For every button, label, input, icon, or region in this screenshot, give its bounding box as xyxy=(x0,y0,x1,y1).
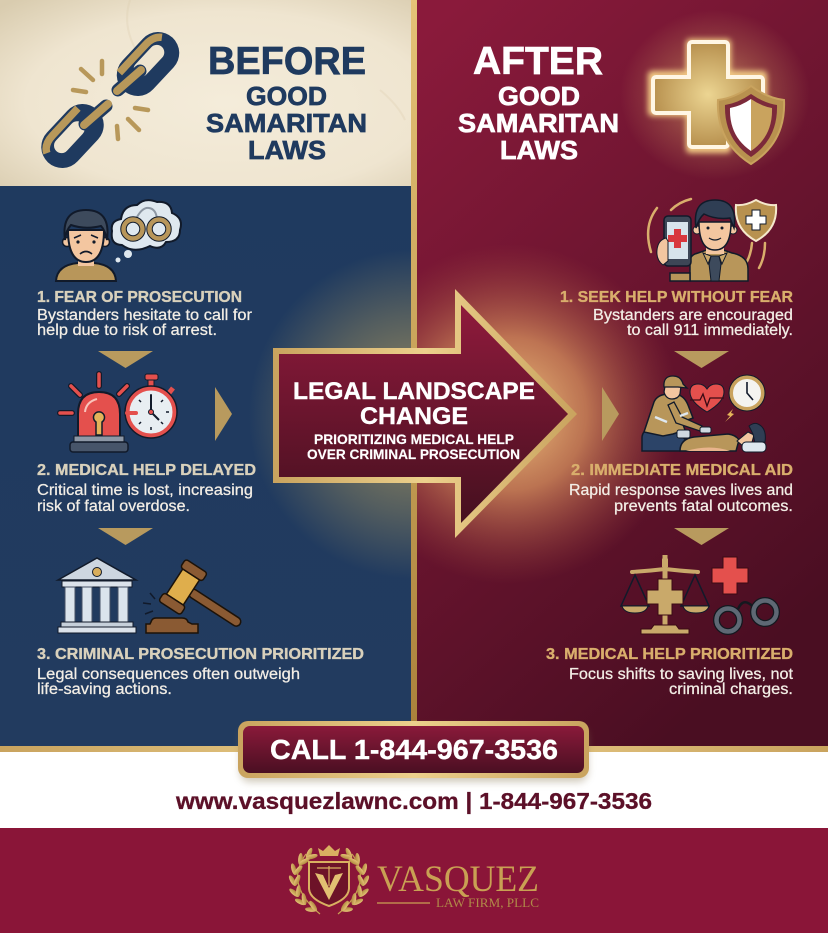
text: arrow label: CHANGE xyxy=(360,403,468,430)
text: criminal prosecution prioritized: 3. CRIMINAL PROSECUTION PRIORITIZED xyxy=(37,646,364,663)
text: medical help prioritized: 3. MEDICAL HELP PRIORITIZED xyxy=(546,646,793,663)
heading: before: GOOD xyxy=(246,81,327,111)
heading: after: AFTER xyxy=(473,40,603,83)
icon: glowing cross with shield xyxy=(652,42,784,164)
call button: CALL 1-844-967-3536 xyxy=(270,734,558,765)
text: medical help prioritized: Focus shifts to saving lives, not xyxy=(569,666,794,683)
heading: after xyxy=(458,40,619,165)
text: immediate medical aid xyxy=(569,462,793,515)
icon: siren and stopwatch xyxy=(60,374,177,452)
text: medical help prioritized xyxy=(546,646,794,698)
text: medical help delayed xyxy=(37,462,256,515)
center gold divider xyxy=(411,0,417,746)
text: immediate medical aid: prevents fatal outcomes. xyxy=(614,498,793,515)
arrow: legal landscape change xyxy=(273,289,577,538)
text: arrow label: OVER CRIMINAL PROSECUTION xyxy=(307,447,520,462)
icon: person with phone xyxy=(648,199,776,281)
text: medical help delayed: risk of fatal overdose. xyxy=(37,498,190,515)
arrow: right left column xyxy=(215,387,232,441)
panel: before column xyxy=(0,186,411,746)
text: logo wordmark: LAW FIRM, PLLC xyxy=(436,896,539,910)
icon: scales, medical cross and handcuffs xyxy=(621,555,776,634)
text: immediate medical aid: 2. IMMEDIATE MEDICAL AID xyxy=(571,462,793,479)
arrow: down 2 xyxy=(98,528,153,545)
arrow: down 4 xyxy=(674,528,729,545)
heading: before: BEFORE xyxy=(208,40,366,83)
text: arrow label: LEGAL LANDSCAPE xyxy=(293,378,535,405)
footer band xyxy=(0,746,828,828)
website and phone: www.vasquezlawnc.com | 1-844-967-3536 xyxy=(175,788,652,814)
heading: before: SAMARITAN xyxy=(206,108,367,138)
text: seek help without fear: 1. SEEK HELP WITHOUT FEAR xyxy=(560,289,793,306)
text: medical help delayed: Critical time is lost, increasing xyxy=(37,482,253,499)
text: arrow label: PRIORITIZING MEDICAL HELP xyxy=(314,432,514,447)
text: seek help without fear: to call 911 immediately. xyxy=(627,322,793,339)
arrow: right right column xyxy=(602,387,619,441)
icon: courthouse and gavel xyxy=(58,558,254,645)
heading: before: LAWS xyxy=(248,135,326,165)
text: criminal prosecution prioritized: life-saving actions. xyxy=(37,681,172,698)
text: immediate medical aid: Rapid response saves lives and xyxy=(569,482,793,499)
icon: worried person with handcuff thought xyxy=(56,200,181,281)
heading: after: GOOD xyxy=(498,81,580,111)
text: medical help delayed: 2. MEDICAL HELP DELAYED xyxy=(37,462,256,479)
icon: broken chain xyxy=(33,23,188,177)
text: seek help without fear: Bystanders are encouraged xyxy=(593,307,793,324)
text: criminal prosecution prioritized xyxy=(37,646,364,698)
heading: before xyxy=(206,40,367,165)
heading: after: SAMARITAN xyxy=(458,108,619,138)
text: seek help without fear xyxy=(560,289,793,339)
icon: medic treating patient xyxy=(642,375,766,452)
panel: after column xyxy=(417,0,828,746)
text: criminal prosecution prioritized: Legal consequences often outweigh xyxy=(37,666,300,683)
text: fear of prosecution: Bystanders hesitate to call for xyxy=(37,307,252,324)
text: fear of prosecution: 1. FEAR OF PROSECUTION xyxy=(37,289,242,306)
text: fear of prosecution: help due to risk of arrest. xyxy=(37,322,217,339)
heading: after: LAWS xyxy=(500,135,578,165)
icon: logo crest xyxy=(288,845,370,914)
panel: before header xyxy=(0,0,411,186)
text: fear of prosecution xyxy=(37,289,252,339)
text: logo wordmark: VASQUEZ xyxy=(377,859,539,900)
text: arrow label xyxy=(293,378,535,462)
arrow: down 1 xyxy=(98,351,153,368)
text: medical help prioritized: criminal charges. xyxy=(669,681,793,698)
panel: logo footer xyxy=(0,828,828,933)
arrow: down 3 xyxy=(674,351,729,368)
call button xyxy=(238,721,589,782)
